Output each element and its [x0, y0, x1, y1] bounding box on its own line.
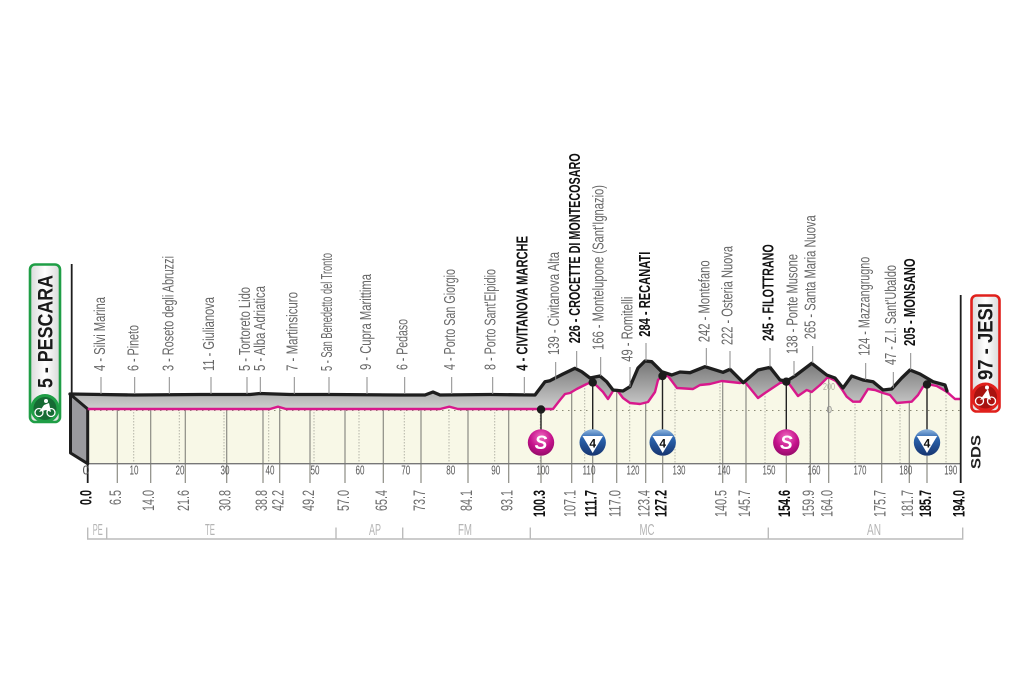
town names: [92, 153, 919, 371]
town names: 11 - Giulianova: [201, 297, 218, 371]
town names: 8 - Porto Sant'Elpidio: [483, 269, 500, 370]
kilometre scale numbers: 90: [491, 464, 500, 478]
town names: 124 - Mazzangrugno: [856, 257, 873, 356]
town names: 4 - Porto San Giorgio: [442, 269, 459, 370]
sprint marker 100.3: S: [535, 433, 548, 454]
distance values: 21.6: [175, 490, 193, 511]
town names: 6 - Pineto: [126, 325, 142, 371]
town names: 284 - RECANATI: [637, 252, 654, 337]
kilometre scale numbers: 140: [718, 464, 731, 478]
kilometre scale numbers: 40: [266, 464, 275, 478]
distance values: 140.5: [712, 490, 730, 517]
town names: 47 - Z.I. Sant'Ubaldo: [883, 265, 900, 365]
distance values: 107.1: [562, 490, 580, 517]
town names: 205 - MONSANO: [902, 258, 919, 346]
kilometre scale numbers: [83, 464, 957, 478]
kilometre scale numbers: 80: [446, 464, 455, 478]
kilometre scale numbers: 0: [83, 464, 90, 478]
sprint marker 100.3: [528, 429, 554, 456]
climb marker 127.2: 4: [659, 436, 666, 450]
distance values: 6.5: [107, 490, 125, 505]
kilometre grid dotted lines: [134, 381, 946, 464]
climb marker 111.7: 4: [589, 436, 596, 450]
kilometre scale numbers: 180: [899, 464, 912, 478]
distance values: 123.4: [636, 490, 654, 517]
sprint marker 154.6: [773, 429, 800, 456]
distance values: 159.9: [800, 490, 818, 517]
distance values: 73.7: [411, 490, 429, 511]
axis baseline: [88, 463, 961, 465]
kilometre scale numbers: 120: [626, 464, 640, 478]
distance values: 38.8: [253, 490, 271, 511]
main point tick lines: [117, 378, 927, 483]
vertical frame lines: [72, 264, 961, 483]
town names: 5 - Alba Adriatica: [252, 286, 269, 371]
province bar: AN: [867, 522, 881, 539]
distance values: 65.4: [373, 490, 391, 511]
distance values: 84.1: [458, 490, 476, 511]
kilometre scale numbers: 70: [401, 464, 410, 478]
pink road line: [88, 376, 961, 409]
climb marker 185.7: 4: [924, 436, 931, 450]
distance values: 164.0: [818, 490, 836, 517]
province bar: FM: [458, 522, 472, 539]
town names: 139 - Civitanova Alta: [546, 252, 563, 355]
distance values: 194.0: [950, 490, 968, 517]
sprint marker 154.6: S: [780, 433, 793, 454]
distance values: 100.3: [531, 490, 549, 517]
distance values: 42.2: [270, 490, 288, 511]
kilometre scale numbers: 150: [762, 464, 776, 478]
town names: 265 - Santa Maria Nuova: [803, 215, 820, 339]
sea level dotted line: [88, 410, 960, 412]
distance values: 57.0: [335, 490, 353, 511]
distance values: 175.7: [872, 490, 890, 517]
kilometre scale numbers: 170: [854, 464, 867, 478]
start sign: Pescara: 5 - PESCARA: [34, 275, 58, 388]
town names: 5 - San Benedetto del Tronto: [319, 253, 336, 371]
distance values: 154.6: [776, 490, 794, 517]
altitude scale labels: 0: [826, 405, 832, 416]
distance values: 111.7: [582, 490, 600, 517]
town names: 4 - Silvi Marina: [92, 297, 109, 371]
finish sign: Jesi: 97 - JESI: [974, 303, 998, 380]
town names: 6 - Pedaso: [395, 319, 412, 370]
kilometre scale numbers: 10: [130, 464, 139, 478]
altitude scale labels: 200: [823, 382, 835, 393]
town names: 3 - Roseto degli Abruzzi: [160, 256, 177, 371]
icon: finish cyclist: [971, 382, 1000, 412]
province bar: [88, 522, 963, 539]
climb marker 127.2: [650, 429, 676, 456]
town names: 5 - Tortoreto Lido: [237, 287, 254, 371]
black elevation outline: [70, 361, 947, 395]
kilometre scale numbers: 160: [808, 464, 821, 478]
climb marker 111.7: [580, 429, 606, 456]
start sign: Pescara: [30, 264, 60, 423]
distance values: 14.0: [140, 490, 158, 511]
town names: 138 - Ponte Musone: [784, 254, 801, 354]
distance values: 30.8: [216, 490, 234, 511]
town names: 242 - Montefano: [696, 260, 713, 342]
town tick lines: [101, 343, 911, 394]
town names: 245 - FILOTTRANO: [760, 244, 777, 341]
kilometre scale numbers: 110: [582, 464, 596, 478]
province bar: MC: [640, 522, 654, 539]
sponsor logo: SDS: SDS: [968, 435, 984, 469]
province bar: AP: [369, 522, 381, 539]
kilometre scale numbers: 50: [310, 464, 320, 478]
kilometre scale numbers: 20: [176, 464, 185, 478]
left side 3D face: [70, 394, 88, 464]
route point dots: [537, 372, 931, 414]
province bar: PE: [93, 522, 103, 539]
kilometre scale numbers: 30: [220, 464, 230, 478]
town names: 166 - Montelupone (Sant'Ignazio): [590, 185, 607, 350]
distance values: 117.0: [606, 490, 624, 517]
distance values: 93.1: [498, 490, 516, 511]
altitude scale labels: [823, 382, 835, 416]
province bar: TE: [205, 522, 215, 539]
distance values: 49.2: [300, 490, 318, 511]
town names: 49 - Romitelli: [620, 297, 637, 362]
climb and sprint connector lines: [541, 376, 927, 432]
distance values: 127.2: [652, 490, 670, 517]
kilometre scale numbers: 130: [672, 464, 686, 478]
kilometre scale numbers: 190: [944, 464, 957, 478]
stage profile chart: [70, 264, 961, 483]
finish sign: Jesi: [971, 296, 1000, 412]
kilometre scale numbers: 100: [536, 464, 550, 478]
distance values: [78, 490, 968, 517]
distance values: 185.7: [917, 490, 935, 517]
distance values: 0.0: [78, 490, 96, 505]
town names: 226 - CROCETTE DI MONTECOSARO: [567, 153, 584, 343]
distance values: 181.7: [899, 490, 917, 517]
town names: 9 - Cupra Marittima: [358, 274, 375, 370]
town names: 4 - CIVITANOVA MARCHE: [514, 236, 531, 371]
distance values: 145.7: [736, 490, 754, 517]
town names: 222 - Osteria Nuova: [720, 246, 737, 345]
icon: start cyclist: [30, 394, 60, 423]
kilometre scale numbers: 60: [356, 464, 365, 478]
town names: 7 - Martinsicuro: [284, 292, 301, 371]
cream ground area: [88, 376, 961, 464]
climb marker 185.7: [914, 429, 940, 456]
gray elevation area: [70, 361, 947, 420]
